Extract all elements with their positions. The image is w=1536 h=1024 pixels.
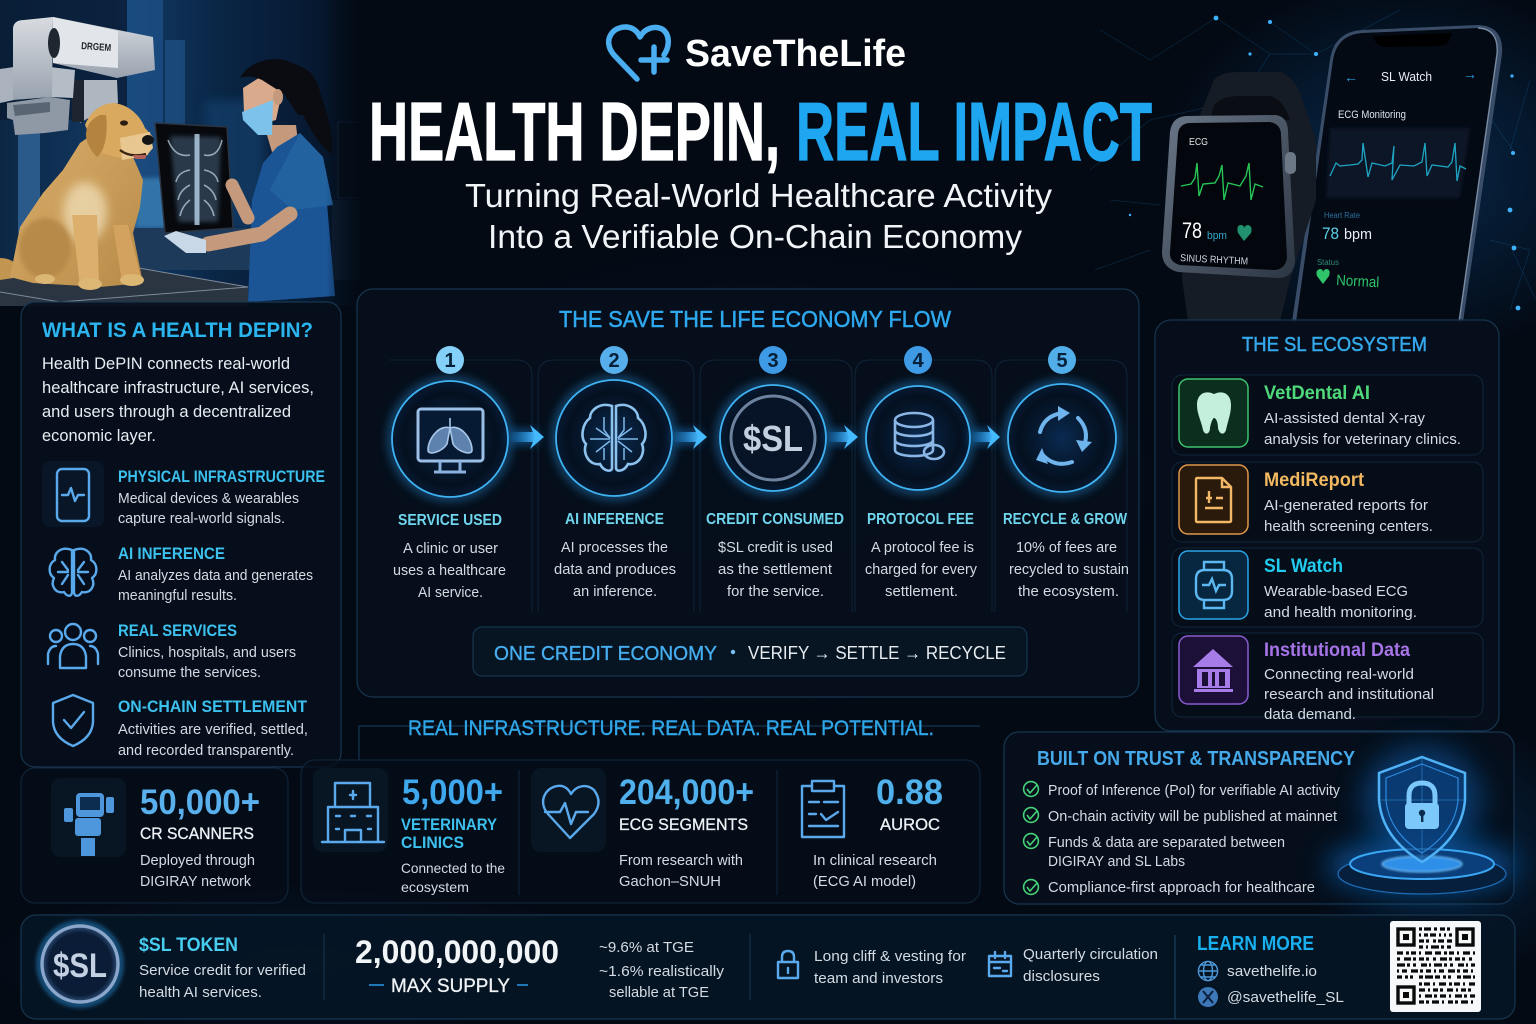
step 5: recycle and grow: RECYCLE & GROW (1003, 511, 1128, 528)
step 2: ai inference: 2 (608, 350, 620, 372)
stat card: auroc: 0.88 (876, 773, 943, 812)
band: real infrastructure heading (359, 717, 980, 760)
device: phone with SL Watch app: bpm (1344, 226, 1372, 243)
tge figures: ~9.6% at TGE (599, 939, 694, 956)
panel: built on trust and transparency (1004, 732, 1517, 904)
card: sl watch: SL Watch (1264, 556, 1343, 577)
qr code (1390, 921, 1481, 1012)
disclosure note: Quarterly circulation (1023, 946, 1158, 963)
panel: economy flow (357, 289, 1139, 697)
device: phone with SL Watch app: ECG Monitoring (1338, 109, 1406, 121)
step 3: credit consumed: $SL (743, 418, 803, 459)
panel: sl ecosystem: THE SL ECOSYSTEM (1242, 334, 1427, 356)
checklist: DIGIRAY and SL Labs (1048, 853, 1185, 870)
device: smartwatch: bpm (1207, 230, 1227, 242)
photo sub: x-ray machine: DRGEM (81, 41, 111, 54)
arrow 1 (510, 425, 544, 449)
panel: sl ecosystem (1155, 320, 1499, 731)
photo sub: exam table (0, 267, 248, 306)
device: phone with SL Watch app: Normal (1336, 272, 1380, 291)
device: phone with SL Watch app: SL Watch (1381, 69, 1432, 84)
card: vetdental ai: AI-assisted dental X-ray (1264, 410, 1425, 427)
vesting note (778, 948, 966, 987)
step 3: credit consumed: $SL credit is used (718, 539, 833, 556)
token description: $SL TOKEN (139, 935, 238, 956)
card: medireport: MediReport (1264, 470, 1365, 491)
checklist (1024, 782, 1340, 896)
step 5: recycle and grow: 5 (1056, 350, 1068, 372)
chart: watch ECG trace (1181, 163, 1263, 200)
item: physical infrastructure (42, 461, 325, 527)
card: vetdental ai: analysis for veterinary clinics. (1264, 431, 1461, 448)
item: ai inference: meaningful results. (118, 587, 237, 604)
learn more: LEARN MORE (1197, 933, 1314, 955)
device: smartwatch (1162, 72, 1316, 322)
stat card: veterinary clinics: ecosystem (401, 879, 469, 895)
stat card: veterinary clinics: CLINICS (401, 833, 464, 852)
step 2: ai inference (554, 346, 676, 600)
checklist: Funds & data are separated between (1048, 834, 1285, 851)
panel heading: WHAT IS A HEALTH DEPIN? (42, 319, 313, 342)
stat card: cr scanners: Deployed through (140, 852, 255, 869)
device: phone with SL Watch app: Status (1317, 258, 1339, 267)
band: real infrastructure heading: REAL INFRASTRUCTURE. REAL DATA. REAL POTENTIAL. (408, 717, 934, 740)
item: real services: REAL SERVICES (118, 621, 237, 640)
step 1: service used: AI service. (418, 584, 483, 601)
max supply: 2,000,000,000 (355, 934, 559, 970)
step 5: recycle and grow: the ecosystem. (1018, 583, 1119, 600)
icon: glowing shield and lock (1327, 745, 1517, 894)
intro text (42, 354, 314, 445)
stat card: auroc: In clinical research (813, 852, 937, 869)
subtitle (465, 177, 1053, 255)
item: real services (48, 621, 296, 681)
step 1: service used: SERVICE USED (398, 512, 502, 529)
learn more (1175, 933, 1344, 1019)
max supply: MAX SUPPLY (391, 976, 510, 997)
tge figures: sellable at TGE (609, 984, 709, 1001)
step 2: ai inference: AI INFERENCE (565, 511, 664, 528)
card: vetdental ai (1172, 375, 1483, 455)
step 4: protocol fee (865, 346, 977, 600)
token description: Service credit for verified (139, 962, 306, 979)
step 2: ai inference: data and produces (554, 561, 676, 578)
card: institutional data: Institutional Data (1264, 640, 1410, 661)
device: smartwatch: SINUS RHYTHM (1180, 253, 1248, 268)
subtitle: Turning Real-World Healthcare Activity (465, 177, 1053, 214)
disclosure note (989, 946, 1158, 985)
step 5: recycle and grow: recycled to sustain (1009, 561, 1129, 578)
stat card: cr scanners (21, 768, 288, 903)
title: REAL IMPACT (796, 85, 1152, 178)
stat card: ecg segments (519, 768, 777, 895)
card: sl watch (1172, 548, 1483, 627)
stat card: cr scanners: DIGIRAY network (140, 873, 251, 890)
step 3: credit consumed: 3 (767, 350, 779, 372)
icon: sl coin: $SL (53, 947, 107, 985)
icon: x handle (1198, 987, 1218, 1007)
tge figures (599, 939, 725, 1001)
card: sl watch: Wearable-based ECG (1264, 583, 1408, 600)
tge figures: ~1.6% realistically (599, 963, 725, 980)
step 1: service used: A clinic or user (403, 540, 498, 557)
flow heading: THE SAVE THE LIFE ECONOMY FLOW (559, 306, 951, 332)
checklist: Compliance-first approach for healthcare (1048, 879, 1315, 896)
device: phone with SL Watch app: 78 (1322, 224, 1339, 243)
card: institutional data: Connecting real-world (1264, 666, 1414, 683)
step 3: credit consumed: for the service. (727, 583, 824, 600)
item: on-chain settlement: Activities are verified, settled, (118, 721, 308, 738)
stat card: ecg segments: ECG SEGMENTS (619, 815, 748, 834)
banner: one credit economy (473, 627, 1027, 676)
item: ai inference (50, 544, 313, 604)
icon: sl coin (39, 923, 121, 1005)
stat card: ecg segments: Gachon–SNUH (619, 873, 721, 890)
item: ai inference: AI INFERENCE (118, 544, 225, 563)
card: medireport: AI-generated reports for (1264, 497, 1428, 514)
step 3: credit consumed: CREDIT CONSUMED (706, 511, 844, 528)
device: smartwatch: ECG (1189, 137, 1208, 148)
icon: globe (1198, 961, 1218, 981)
banner: one credit economy: ONE CREDIT ECONOMY (494, 643, 717, 665)
step 3: credit consumed: as the settlement (718, 561, 833, 578)
stat card: auroc: (ECG AI model) (813, 873, 916, 890)
item: physical infrastructure: PHYSICAL INFRASTRUCTURE (118, 467, 325, 486)
intro text: healthcare infrastructure, AI services, (42, 378, 314, 397)
stat card: auroc (802, 773, 943, 890)
step 4: protocol fee: 4 (912, 350, 924, 372)
stat card: ecg segments: From research with (619, 852, 743, 869)
banner: one credit economy: VERIFY → SETTLE → RECYCLE (748, 643, 1006, 663)
stat card: auroc: AUROC (880, 815, 940, 834)
learn more: @savethelife_SL (1227, 989, 1344, 1006)
photo sub: x-ray tablet (155, 123, 233, 233)
step 1: service used: uses a healthcare (393, 562, 506, 579)
vesting note: team and investors (814, 970, 943, 987)
vesting note: Long cliff & vesting for (814, 948, 966, 965)
card: vetdental ai: VetDental AI (1264, 383, 1370, 404)
title: HEALTH DEPIN, (369, 85, 780, 178)
item: on-chain settlement: and recorded transparently. (118, 742, 294, 759)
item: on-chain settlement: ON-CHAIN SETTLEMENT (118, 697, 308, 716)
stat card: cr scanners: CR SCANNERS (140, 824, 254, 843)
card: medireport: health screening centers. (1264, 518, 1433, 535)
step 3: credit consumed (706, 346, 844, 600)
stat card: veterinary clinics (301, 760, 980, 903)
item: ai inference: AI analyzes data and generates (118, 567, 313, 584)
panel: built on trust and transparency: BUILT ON TRUST & TRANSPARENCY (1037, 748, 1356, 770)
intro text: and users through a decentralized (42, 402, 291, 421)
max supply (324, 934, 750, 1000)
step 4: protocol fee: A protocol fee is (871, 539, 974, 556)
item: physical infrastructure: capture real-world signals. (118, 510, 285, 527)
intro text: Health DePIN connects real-world (42, 354, 290, 373)
step 5: recycle and grow (1003, 346, 1129, 600)
logo: heart with plus (609, 27, 668, 79)
step 4: protocol fee: PROTOCOL FEE (867, 511, 974, 528)
card: sl watch: and health monitoring. (1264, 604, 1417, 621)
stat card: veterinary clinics: Connected to the (401, 860, 505, 876)
stat card: ecg segments: 204,000+ (619, 773, 754, 812)
stat card: cr scanners: 50,000+ (140, 783, 260, 822)
arrow 4 (971, 425, 1000, 449)
disclosure note: disclosures (1023, 968, 1100, 985)
panel: sl token bar (21, 915, 1515, 1019)
step 2: ai inference: AI processes the (561, 539, 668, 556)
token description (139, 935, 306, 1001)
token description: health AI services. (139, 984, 262, 1001)
step 1: service used (392, 346, 508, 601)
photo sub: nurse in blue scrubs (164, 59, 335, 302)
item: physical infrastructure: Medical devices & wearables (118, 490, 299, 507)
device: phone with SL Watch app (1292, 25, 1502, 322)
step 4: protocol fee: settlement. (885, 583, 958, 600)
item: real services: consume the services. (118, 664, 261, 681)
card: institutional data: research and institutional (1264, 686, 1434, 703)
checklist: On-chain activity will be published at mainnet (1048, 808, 1338, 825)
panel: what is a health depin (21, 302, 341, 767)
arrow 3 (828, 425, 858, 449)
item: on-chain settlement (53, 695, 308, 759)
learn more: savethelife.io (1227, 963, 1317, 980)
device: phone with SL Watch app: → (1463, 66, 1477, 82)
card: institutional data: data demand. (1264, 706, 1356, 723)
chart: phone ECG trace (1330, 143, 1466, 181)
checklist: Proof of Inference (PoI) for verifiable AI activity (1048, 782, 1340, 799)
photo sub: x-ray machine (0, 17, 155, 135)
card: institutional data (1172, 633, 1483, 723)
subtitle: Into a Verifiable On-Chain Economy (488, 218, 1022, 255)
stat card: veterinary clinics: 5,000+ (402, 773, 503, 812)
brand name: SaveTheLife (685, 33, 906, 75)
item: real services: Clinics, hospitals, and users (118, 644, 296, 661)
step 4: protocol fee: charged for every (865, 561, 977, 578)
step 1: service used: 1 (444, 350, 456, 372)
photo: vet with golden retriever and x-ray (0, 0, 362, 306)
device: phone with SL Watch app: Heart Rate (1324, 211, 1361, 220)
step 5: recycle and grow: 10% of fees are (1016, 539, 1117, 556)
intro text: economic layer. (42, 426, 156, 445)
card: medireport (1172, 462, 1483, 542)
stat card: veterinary clinics: VETERINARY (401, 815, 498, 834)
device: smartwatch: 78 (1182, 218, 1202, 243)
device: phone with SL Watch app: ← (1344, 69, 1358, 85)
step 2: ai inference: an inference. (573, 583, 657, 600)
arrow 2 (673, 425, 707, 449)
photo sub: golden retriever (0, 103, 154, 290)
